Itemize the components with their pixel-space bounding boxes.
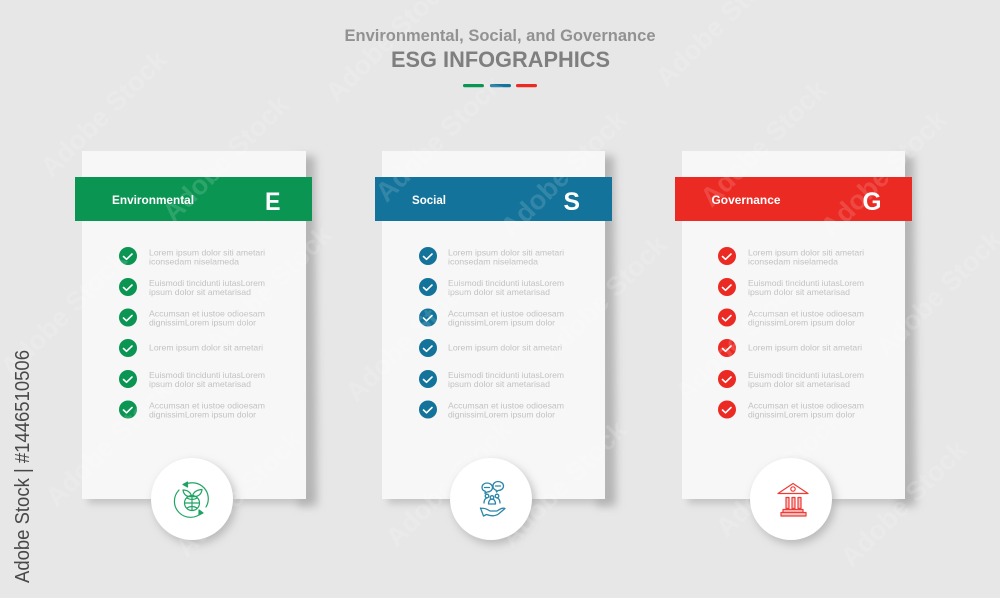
item 4: Lorem ipsum dolor sit ametari: [748, 342, 862, 352]
card shadow: [88, 156, 317, 506]
item 1: Lorem ipsum dolor siti ametari: [448, 248, 564, 258]
item 4: Lorem ipsum dolor sit ametari: [448, 342, 562, 352]
icon: globe with leaves and cycle arrows: [174, 482, 208, 517]
checklist: [419, 247, 564, 420]
icon badge: governance: [750, 458, 835, 544]
item 3: dignissimLorem ipsum dolor: [149, 318, 256, 328]
card: [82, 151, 306, 499]
stock watermark: Adobe Stock: [380, 414, 518, 553]
item 6: dignissimLorem ipsum dolor: [448, 410, 555, 420]
item 2: [718, 278, 864, 297]
item 5: [718, 370, 864, 389]
header banner: E: [265, 188, 280, 216]
item 5: ipsum dolor sit ametarisad: [748, 379, 850, 389]
item 1: [419, 247, 564, 266]
card shadow: [388, 156, 616, 506]
item 6: Accumsan et iustoe odioesam: [448, 400, 564, 410]
item 2: [419, 278, 564, 297]
subtitle: Environmental, Social, and Governance: [344, 27, 656, 45]
item 2: Euismodi tincidunti iutasLorem: [149, 278, 265, 288]
stock watermark: Adobe Stock: [170, 424, 308, 563]
item 3: [419, 308, 564, 328]
item 5: ipsum dolor sit ametarisad: [448, 379, 550, 389]
header banner: Environmental: [112, 195, 194, 207]
title block: [344, 27, 656, 87]
item 3: dignissimLorem ipsum dolor: [448, 318, 555, 328]
stock watermark: Adobe Stock: [835, 434, 973, 573]
panel: social: [375, 151, 616, 544]
item 6: [718, 400, 864, 420]
icon: government building: [778, 484, 808, 516]
item 2: ipsum dolor sit ametarisad: [448, 287, 550, 297]
stock watermark: Adobe Stock: [35, 44, 173, 183]
stock watermark: Adobe Stock: [200, 219, 338, 358]
header banner: S: [564, 188, 580, 216]
stock watermark: Adobe Stock: [370, 69, 508, 208]
item 2: [119, 278, 265, 297]
item 2: Euismodi tincidunti iutasLorem: [748, 278, 864, 288]
header banner: [675, 177, 912, 221]
checklist: [718, 247, 864, 420]
item 5: Euismodi tincidunti iutasLorem: [448, 370, 564, 380]
item 6: Accumsan et iustoe odioesam: [748, 400, 864, 410]
stock watermark: Adobe Stock: [535, 229, 673, 368]
stock watermark: Adobe Stock: [670, 269, 808, 408]
item 2: ipsum dolor sit ametarisad: [748, 287, 850, 297]
item 4: [119, 339, 263, 357]
item 3: Accumsan et iustoe odioesam: [748, 308, 864, 318]
stock watermark: Adobe Stock: [340, 269, 478, 408]
stock watermark: Adobe Stock: [495, 414, 633, 553]
stock watermark: Adobe Stock: [495, 104, 633, 243]
stock watermark: Adobe Stock: [40, 374, 178, 513]
item 2: Euismodi tincidunti iutasLorem: [448, 278, 564, 288]
card: [682, 151, 905, 499]
panel: environmental: [75, 151, 317, 544]
card: [382, 151, 605, 499]
icon badge: environmental: [151, 458, 236, 544]
item 2: ipsum dolor sit ametarisad: [149, 287, 251, 297]
item 4: Lorem ipsum dolor sit ametari: [149, 342, 263, 352]
stock watermark: Adobe Stock: [710, 404, 848, 543]
item 3: Accumsan et iustoe odioesam: [448, 308, 564, 318]
panel: governance: [675, 151, 916, 544]
stock id side label: Adobe Stock | #1446510506: [12, 350, 34, 583]
item 3: [718, 308, 864, 328]
stock watermark: Adobe Stock: [695, 74, 833, 213]
item 1: [119, 247, 265, 266]
item 1: iconsedam niselameda: [748, 256, 838, 266]
item 5: Euismodi tincidunti iutasLorem: [748, 370, 864, 380]
item 5: [119, 370, 265, 389]
checklist: [119, 247, 265, 420]
stock watermark: Adobe Stock: [815, 104, 953, 243]
item 3: [119, 308, 265, 328]
item 1: iconsedam niselameda: [448, 256, 538, 266]
item 6: Accumsan et iustoe odioesam: [149, 400, 265, 410]
item 6: [119, 400, 265, 420]
item 1: Lorem ipsum dolor siti ametari: [149, 248, 265, 258]
item 5: Euismodi tincidunti iutasLorem: [149, 370, 265, 380]
header banner: Governance: [712, 195, 780, 207]
item 4: [419, 339, 562, 357]
icon: hand holding people with speech bubbles: [480, 482, 505, 516]
icon badge: social: [450, 458, 535, 544]
header banner: [75, 177, 312, 221]
item 6: dignissimLorem ipsum dolor: [748, 410, 855, 420]
item 3: Accumsan et iustoe odioesam: [149, 308, 265, 318]
header banner: [375, 177, 612, 221]
card shadow: [688, 156, 916, 506]
item 1: iconsedam niselameda: [149, 256, 239, 266]
header banner: G: [862, 188, 882, 216]
stock watermark: Adobe Stock: [157, 89, 295, 228]
item 1: [718, 247, 864, 266]
header banner: Social: [412, 195, 446, 207]
item 5: [419, 370, 564, 389]
item 6: dignissimLorem ipsum dolor: [149, 410, 256, 420]
item 4: [718, 339, 862, 357]
colour dashes: [463, 84, 537, 87]
main title: ESG INFOGRAPHICS: [391, 47, 610, 72]
item 1: Lorem ipsum dolor siti ametari: [748, 248, 864, 258]
item 5: ipsum dolor sit ametarisad: [149, 379, 251, 389]
item 3: dignissimLorem ipsum dolor: [748, 318, 855, 328]
item 6: [419, 400, 564, 420]
